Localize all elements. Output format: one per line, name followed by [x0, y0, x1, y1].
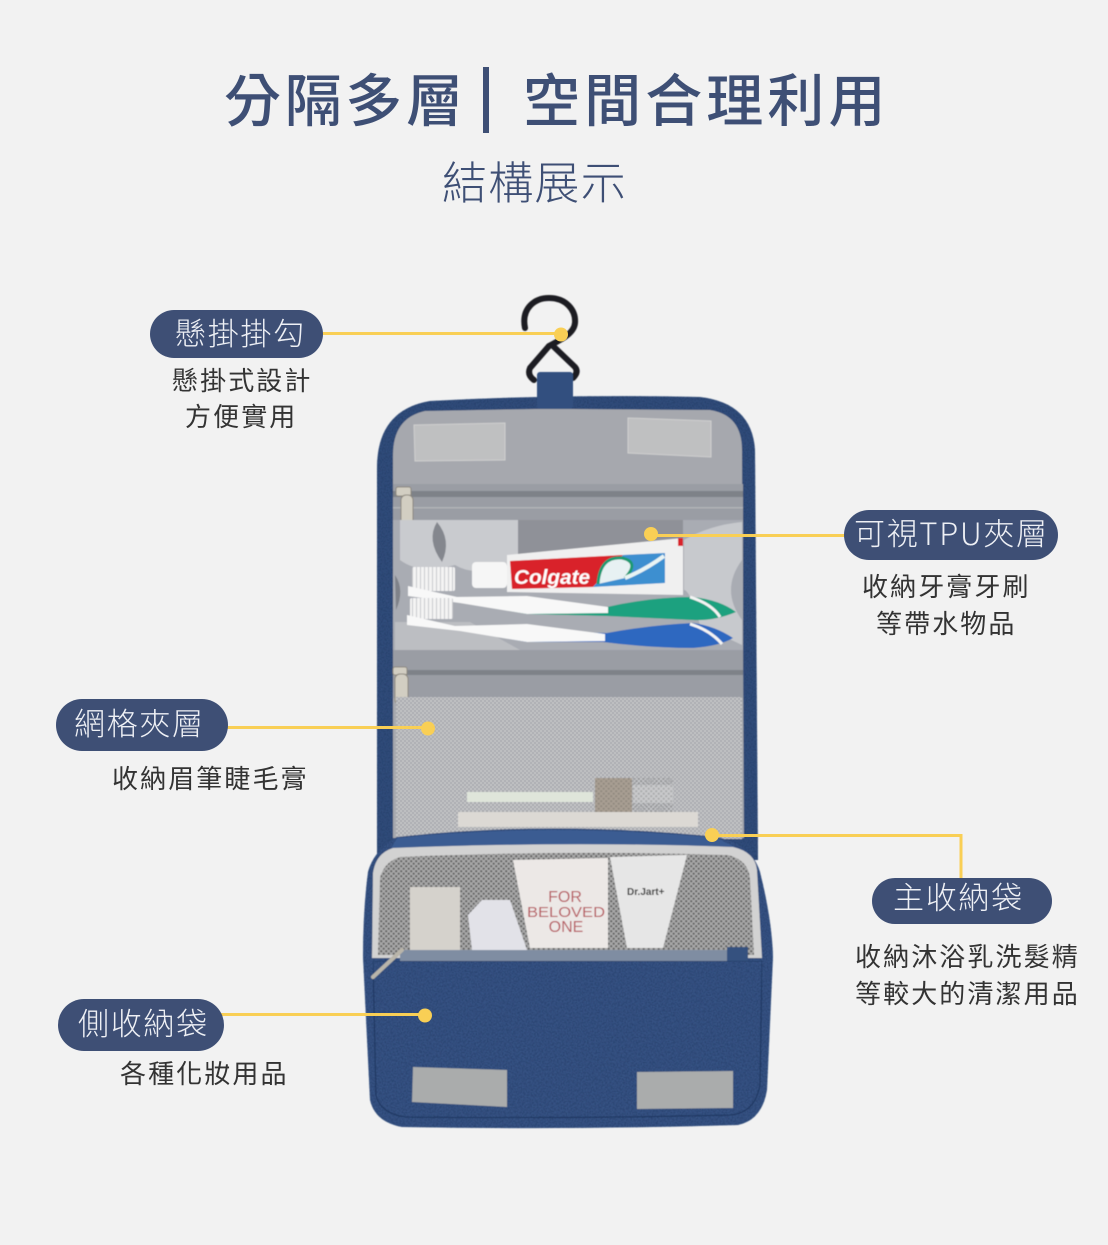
icon: zipper pull 1: [396, 487, 413, 525]
callout: main pouch: 收納沐浴乳洗髮精: [855, 937, 1080, 974]
cream tube label: BELOVED: [527, 904, 605, 921]
title: 空間合理利用: [523, 56, 890, 138]
hanging loop tab: [537, 372, 573, 409]
callout: TPU layer: 可視TPU夾層: [854, 509, 1049, 554]
subtitle: 結構展示: [442, 147, 627, 212]
mesh window: [372, 844, 762, 958]
callout: TPU layer: 等帶水物品: [876, 604, 1017, 641]
callout: mesh layer: [56, 699, 435, 796]
jar: [410, 887, 460, 950]
upper zipper band: [393, 484, 743, 520]
callout: side pouch: [58, 999, 432, 1091]
flap outer shell: [377, 396, 758, 860]
callout: mesh layer: 網格夾層: [74, 699, 205, 744]
icon: hanger hook: [524, 298, 577, 380]
title: [224, 56, 890, 138]
lower zipper band: [393, 650, 743, 698]
callout: TPU layer: 收納牙膏牙刷: [862, 567, 1031, 604]
callout: hook: 懸掛掛勾: [175, 309, 306, 354]
callout: mesh layer: 收納眉筆睫毛膏: [112, 759, 309, 796]
cream tube label: FOR: [548, 889, 582, 906]
green toothbrush: [408, 567, 736, 620]
cleanser tube: Dr.Jart+: [627, 887, 665, 898]
blue toothbrush: [407, 598, 733, 648]
main pouch top binding: [390, 830, 745, 852]
callout: TPU layer: [644, 509, 1058, 641]
callout: main pouch: 等較大的清潔用品: [855, 974, 1080, 1011]
callout: hook: 懸掛式設計: [172, 361, 313, 398]
makeup pens behind mesh: [458, 778, 698, 827]
mesh pocket: [396, 697, 742, 839]
main pouch shell: [363, 828, 773, 1128]
toothpaste tube: Colgate: [514, 567, 590, 589]
bottom velcro strips: [412, 1067, 733, 1109]
callout: main pouch: [705, 828, 1080, 1011]
callout: side pouch: 各種化妝用品: [120, 1054, 289, 1091]
callout: hook: [150, 309, 568, 434]
toothpaste tube: [472, 538, 683, 595]
top velcro strips: [414, 418, 711, 461]
front pocket panel: [373, 947, 762, 1118]
product photo: toiletry bag: [363, 298, 773, 1128]
cleanser tube: [610, 855, 687, 948]
callout: hook: 方便實用: [185, 397, 297, 434]
callout: side pouch: 側收納袋: [78, 999, 209, 1044]
mesh overlay: [378, 853, 754, 955]
cream tube label: ONE: [549, 919, 583, 936]
callout: main pouch: 主收納袋: [893, 873, 1024, 918]
icon: zipper pull 2: [393, 667, 408, 705]
cream tube label: [513, 858, 608, 948]
white bottle: [468, 900, 527, 950]
title: 分隔多層: [224, 56, 467, 138]
clear TPU pocket: [393, 520, 743, 651]
flap grey lining: [393, 409, 744, 838]
